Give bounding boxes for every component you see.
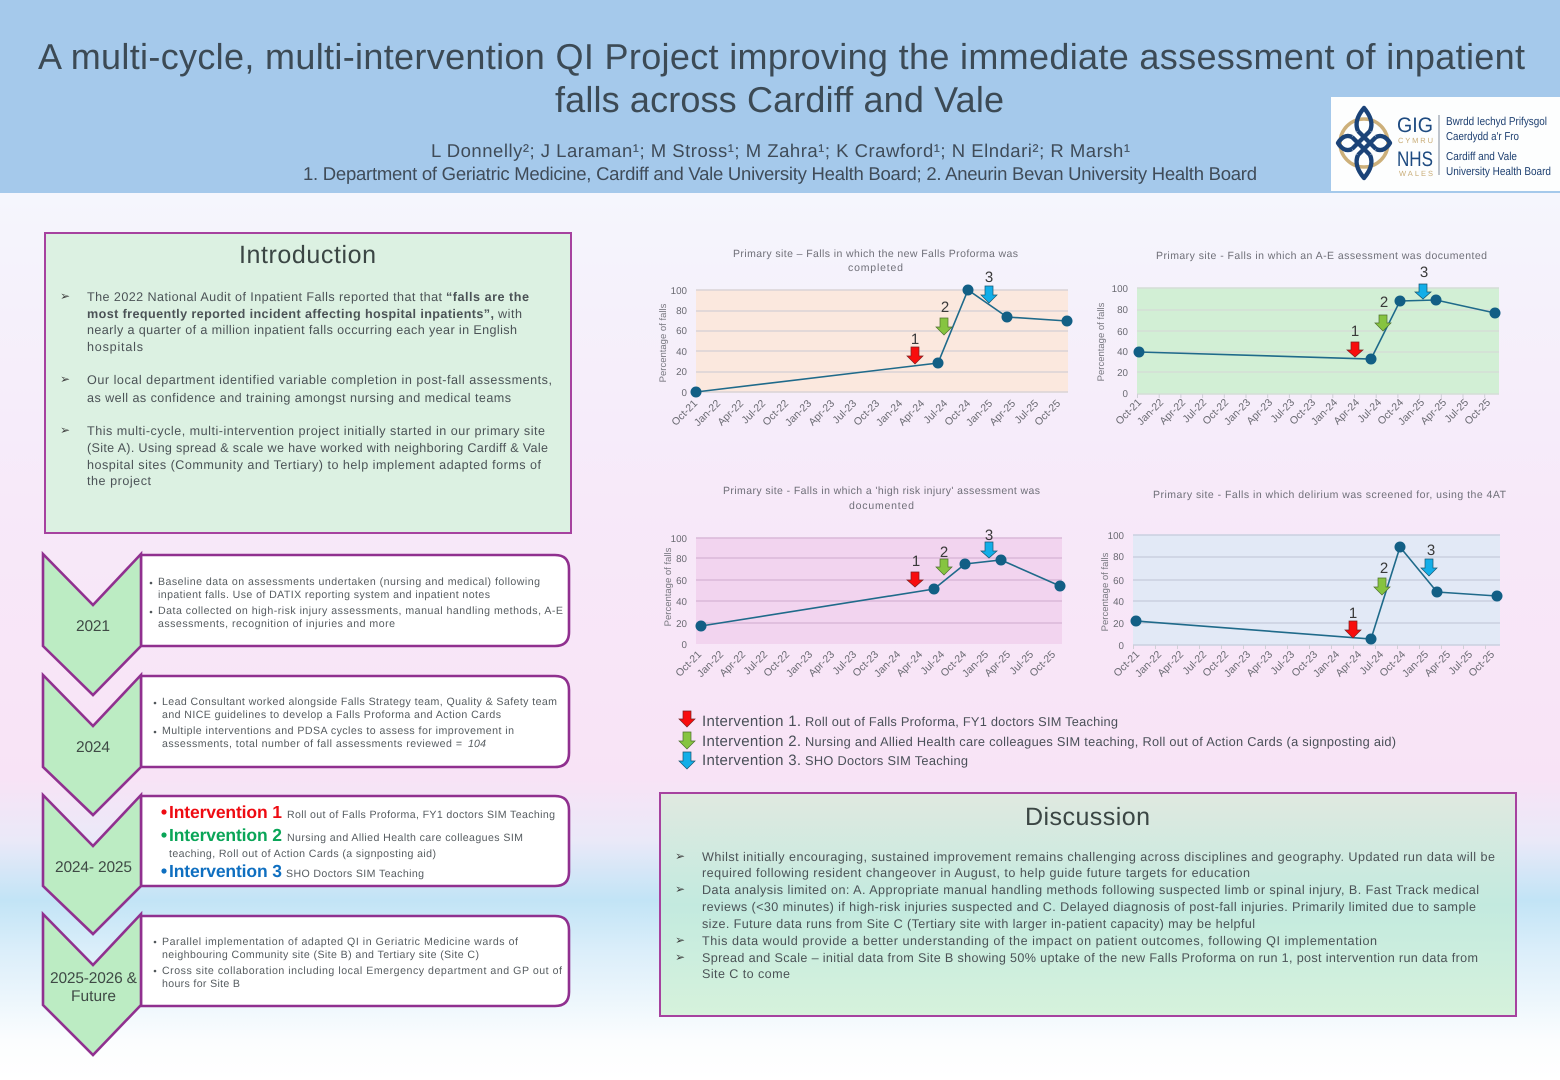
text block: discussion points: reviews (<30 minutes) if high-risk injuries suspected and C. Delayed diagnosis of post-fall injuries. Primarily limited due to sample bbox=[702, 900, 1476, 914]
timeline step: 2021 bbox=[43, 554, 569, 695]
chart: A-E assessment documented: Percentage of falls bbox=[1096, 302, 1107, 381]
chart: delirium screened with 4AT: Oct-24 bbox=[1377, 649, 1408, 679]
chart: A-E assessment documented: 0 bbox=[1123, 389, 1129, 400]
text block: discussion points: ➢ bbox=[675, 950, 685, 964]
timeline step: 2021: Data collected on high-risk injury assessments, manual handling methods, A-E bbox=[158, 605, 563, 617]
chart: high risk injury assessment documented: 60 bbox=[676, 576, 688, 587]
timeline step: 2024-2025 interventions: Intervention 2 bbox=[169, 825, 282, 845]
text block: local department: Our local department identified variable completion in post-fall assessments, bbox=[87, 373, 552, 387]
chart: falls proforma completed: Jul-24 bbox=[921, 398, 950, 426]
chart: high risk injury assessment documented bbox=[663, 485, 1066, 680]
text block: project scope: (Site A). Using spread & scale we have worked with neighboring Cardiff & Vale bbox=[87, 441, 548, 455]
text block: discussion points bbox=[675, 849, 1495, 981]
chart: falls proforma completed: Percentage of falls bbox=[658, 303, 669, 382]
chart: falls proforma completed: Jul-25 bbox=[1012, 398, 1041, 426]
chart: falls proforma completed: Jul-23 bbox=[830, 398, 859, 426]
chart: A-E assessment documented: Jul-24 bbox=[1355, 397, 1384, 425]
chart: high risk injury assessment documented: 80 bbox=[676, 554, 688, 565]
chart: high risk injury assessment documented: documented bbox=[849, 500, 914, 512]
timeline step: 2025-2026 and future: Cross site collaboration including local Emergency department and GP out of bbox=[162, 965, 562, 977]
chart: A-E assessment documented: Apr-22 bbox=[1157, 397, 1188, 427]
chart: A-E assessment documented: Oct-21 bbox=[1113, 397, 1144, 427]
timeline step: 2025-2026 and future bbox=[43, 914, 569, 1055]
chart: delirium screened with 4AT: Jul-25 bbox=[1446, 649, 1475, 677]
text block: discussion points: ➢ bbox=[675, 933, 685, 947]
timeline step: 2021: inpatient falls. Use of DATIX reporting system and inpatient notes bbox=[158, 589, 490, 601]
title: A multi-cycle, multi-intervention QI Project improving the immediate assessment of inpatient bbox=[38, 36, 1525, 77]
chart: delirium screened with 4AT: 40 bbox=[1113, 597, 1125, 608]
timeline step: 2024-2025 interventions: SHO Doctors SIM Teaching bbox=[286, 868, 424, 880]
chart: delirium screened with 4AT: Apr-23 bbox=[1244, 649, 1275, 679]
legend: interventions: Intervention 3. bbox=[702, 752, 801, 769]
text block: discussion points: This data would provide a better understanding of the impact on patient outcomes, following QI implementation bbox=[702, 934, 1377, 948]
chart: falls proforma completed: Oct-21 bbox=[669, 398, 700, 428]
chart: A-E assessment documented: 80 bbox=[1117, 305, 1129, 316]
legend: interventions: Intervention 2. bbox=[702, 733, 801, 750]
timeline step: 2024-2025 interventions: teaching, Roll out of Action Cards (a signposting aid) bbox=[169, 848, 436, 860]
timeline step: 2021: Baseline data on assessments undertaken (nursing and medical) following bbox=[158, 576, 540, 588]
timeline step: 2024: 104 bbox=[468, 738, 486, 750]
text block: audit findings bbox=[60, 289, 529, 354]
chart: A-E assessment documented: Oct-24 bbox=[1375, 397, 1406, 427]
timeline step: 2024: 2024 bbox=[76, 739, 110, 756]
chart: delirium screened with 4AT: Apr-24 bbox=[1333, 649, 1364, 679]
chart: delirium screened with 4AT: Apr-22 bbox=[1155, 649, 1186, 679]
text block: audit findings: ➢ bbox=[60, 289, 70, 303]
text block: discussion points: Data analysis limited on: A. Appropriate manual handling methods following suspected limb or spinal injury, B. Fast Track medical bbox=[702, 883, 1479, 897]
text block: local department bbox=[60, 372, 552, 405]
chart: high risk injury assessment documented: Percentage of falls bbox=[663, 547, 674, 626]
chart: delirium screened with 4AT: 2 bbox=[1380, 560, 1388, 577]
title: falls across Cardiff and Vale bbox=[555, 79, 1004, 120]
chart: high risk injury assessment documented: Oct-22 bbox=[761, 649, 792, 679]
panel: introduction bbox=[45, 233, 571, 533]
title bbox=[38, 36, 1525, 120]
heading: introduction: Introduction bbox=[239, 241, 376, 269]
chart: high risk injury assessment documented: Apr-24 bbox=[894, 649, 925, 679]
timeline step: 2024-2025 interventions: 2024- 2025 bbox=[55, 859, 132, 876]
chart: A-E assessment documented: 40 bbox=[1117, 347, 1129, 358]
timeline step: 2024-2025 interventions bbox=[43, 795, 569, 934]
chart: falls proforma completed: Jul-22 bbox=[739, 398, 768, 426]
timeline step: 2024-2025 interventions: Nursing and Allied Health care colleagues SIM bbox=[287, 832, 523, 844]
chart: high risk injury assessment documented: Jan-23 bbox=[784, 649, 815, 680]
chart: falls proforma completed: 20 bbox=[676, 367, 688, 378]
chart: A-E assessment documented: Jan-25 bbox=[1396, 397, 1427, 428]
text block: local department: as well as confidence and training amongst nursing and medical teams bbox=[87, 391, 511, 405]
chart: delirium screened with 4AT: Jul-23 bbox=[1268, 649, 1297, 677]
chart: delirium screened with 4AT: Oct-22 bbox=[1200, 649, 1231, 679]
text block: discussion points: ➢ bbox=[675, 882, 685, 896]
chart: delirium screened with 4AT: Jan-22 bbox=[1133, 649, 1164, 680]
chart: high risk injury assessment documented: Apr-25 bbox=[982, 649, 1013, 679]
chart: high risk injury assessment documented: Jan-24 bbox=[872, 649, 903, 680]
text block: local department: ➢ bbox=[60, 372, 70, 386]
text block: discussion points: Spread and Scale – initial data from Site B showing 50% uptake of the new Falls Proforma on run 1, post intervention run data from bbox=[702, 951, 1478, 965]
chart: delirium screened with 4AT: Percentage of falls bbox=[1100, 552, 1111, 631]
logo: Cardiff and Vale University Health Board: Caerdydd a'r Fro bbox=[1446, 131, 1519, 143]
chart: high risk injury assessment documented: Oct-23 bbox=[850, 649, 881, 679]
chart: A-E assessment documented: Apr-25 bbox=[1418, 397, 1449, 427]
timeline step: 2024-2025 interventions: Intervention 3 bbox=[169, 861, 282, 881]
text block: discussion points: size. Future data runs from Site C (Tertiary site with larger in-patient capacity) may be helpful bbox=[702, 917, 1255, 931]
chart: A-E assessment documented: Apr-24 bbox=[1331, 397, 1362, 427]
chart: A-E assessment documented: Jan-23 bbox=[1222, 397, 1253, 428]
chart: falls proforma completed: Oct-22 bbox=[760, 398, 791, 428]
chart: high risk injury assessment documented: Oct-21 bbox=[673, 649, 704, 679]
chart: high risk injury assessment documented: 0 bbox=[682, 640, 688, 651]
timeline step: 2021: assessments, recognition of injuries and more bbox=[158, 618, 395, 630]
text block: audit findings: most frequently reported incident affecting hospital inpatients”, bbox=[87, 307, 494, 321]
chart: A-E assessment documented: Apr-23 bbox=[1244, 397, 1275, 427]
chart: falls proforma completed: Oct-24 bbox=[942, 398, 973, 428]
timeline step: 2024: Lead Consultant worked alongside Falls Strategy team, Quality & Safety team bbox=[162, 696, 557, 708]
chart: falls proforma completed: completed bbox=[848, 262, 903, 274]
timeline step: 2025-2026 and future: hours for Site B bbox=[162, 978, 240, 990]
chart: A-E assessment documented: Jan-24 bbox=[1309, 397, 1340, 428]
chart: A-E assessment documented: Jul-25 bbox=[1442, 397, 1471, 425]
header banner bbox=[0, 0, 1560, 193]
chart: delirium screened with 4AT: 60 bbox=[1113, 576, 1125, 587]
chart: falls proforma completed: 3 bbox=[985, 269, 993, 286]
chart: delirium screened with 4AT: 3 bbox=[1427, 542, 1435, 559]
chart: falls proforma completed: 1 bbox=[911, 331, 919, 348]
timeline step: 2024: Multiple interventions and PDSA cycles to assess for improvement in bbox=[162, 725, 514, 737]
timeline step: 2025-2026 and future: Parallel implementation of adapted QI in Geriatric Medicine wards of bbox=[162, 936, 518, 948]
chart: A-E assessment documented: 1 bbox=[1351, 323, 1359, 340]
timeline step: 2024: and NICE guidelines to develop a Falls Proforma and Action Cards bbox=[162, 709, 501, 721]
chart: high risk injury assessment documented: Jul-25 bbox=[1007, 649, 1036, 677]
chart: A-E assessment documented: 60 bbox=[1117, 327, 1129, 338]
chart: high risk injury assessment documented: Jan-22 bbox=[695, 649, 726, 680]
chart: falls proforma completed: 60 bbox=[676, 326, 688, 337]
logo: Cardiff and Vale University Health Board bbox=[1331, 97, 1560, 191]
chart: falls proforma completed: Jan-24 bbox=[874, 398, 905, 429]
chart: delirium screened with 4AT: Jan-25 bbox=[1400, 649, 1431, 680]
chart: high risk injury assessment documented: Apr-22 bbox=[717, 649, 748, 679]
chart: delirium screened with 4AT bbox=[1100, 489, 1507, 680]
chart: A-E assessment documented: 3 bbox=[1420, 264, 1428, 281]
text block: discussion points: Site C to come bbox=[702, 967, 790, 981]
chart: falls proforma completed: Jan-25 bbox=[964, 398, 995, 429]
chart: A-E assessment documented: Jan-22 bbox=[1135, 397, 1166, 428]
chart: falls proforma completed bbox=[658, 248, 1072, 429]
authors: L Donnelly²; J Laraman¹; M Stross¹; M Zahra¹; K Crawford¹; N Elndari²; R Marsh¹ bbox=[431, 140, 1130, 161]
chart: falls proforma completed: 0 bbox=[682, 388, 688, 399]
chart: falls proforma completed: 2 bbox=[941, 299, 949, 316]
chart: delirium screened with 4AT: Oct-21 bbox=[1111, 649, 1142, 679]
logo: Cardiff and Vale University Health Board: WALES bbox=[1399, 169, 1433, 178]
chart: high risk injury assessment documented: Jan-25 bbox=[960, 649, 991, 680]
chart: high risk injury assessment documented: 2 bbox=[940, 544, 948, 561]
legend: interventions: Nursing and Allied Health care colleagues SIM teaching, Roll out of Action Cards (a signposting aid) bbox=[805, 734, 1396, 749]
chart: delirium screened with 4AT: Jul-24 bbox=[1357, 649, 1386, 677]
chart: falls proforma completed: 100 bbox=[671, 286, 688, 297]
chart: delirium screened with 4AT: Jul-22 bbox=[1180, 649, 1209, 677]
chart: high risk injury assessment documented: 20 bbox=[676, 619, 688, 630]
logo: Cardiff and Vale University Health Board: GIG bbox=[1397, 114, 1433, 137]
chart: high risk injury assessment documented: 100 bbox=[671, 534, 688, 545]
chart: delirium screened with 4AT: Apr-25 bbox=[1422, 649, 1453, 679]
text block: project scope: ➢ bbox=[60, 423, 70, 437]
affiliations: 1. Department of Geriatric Medicine, Cardiff and Vale University Health Board; 2. Aneurin Bevan University Health Board bbox=[303, 163, 1257, 184]
chart: high risk injury assessment documented: Jul-23 bbox=[830, 649, 859, 677]
timeline step: 2024-2025 interventions: Roll out of Falls Proforma, FY1 doctors SIM Teaching bbox=[287, 809, 555, 821]
timeline step: 2024 bbox=[43, 675, 569, 815]
chart: high risk injury assessment documented: 1 bbox=[912, 553, 920, 570]
logo: Cardiff and Vale University Health Board: NHS bbox=[1397, 148, 1433, 171]
chart: falls proforma completed: Primary site – Falls in which the new Falls Proforma was bbox=[733, 248, 1018, 260]
heading: discussion: Discussion bbox=[1025, 803, 1150, 831]
chart: A-E assessment documented: Primary site - Falls in which an A-E assessment was documented bbox=[1156, 250, 1487, 262]
text block: project scope: This multi-cycle, multi-intervention project initially started in our primary site bbox=[87, 424, 545, 438]
chart: high risk injury assessment documented: Jul-24 bbox=[918, 649, 947, 677]
text block: discussion points: ➢ bbox=[675, 849, 685, 863]
chart: A-E assessment documented: 2 bbox=[1380, 294, 1388, 311]
chart: A-E assessment documented: Oct-25 bbox=[1462, 397, 1493, 427]
chart: falls proforma completed: Apr-24 bbox=[896, 398, 927, 428]
chart: delirium screened with 4AT: 1 bbox=[1349, 605, 1357, 622]
timeline step: 2021: 2021 bbox=[76, 618, 110, 635]
chart: high risk injury assessment documented: Oct-25 bbox=[1027, 649, 1058, 679]
text block: discussion points: Whilst initially encouraging, sustained improvement remains challenging across disciplines and geography. Updated run data will be bbox=[702, 850, 1495, 864]
chart: A-E assessment documented: Jul-22 bbox=[1180, 397, 1209, 425]
chart: falls proforma completed: Oct-23 bbox=[851, 398, 882, 428]
text block: audit findings: nearly a quarter of a million inpatient falls occurring each year in English bbox=[87, 323, 517, 337]
chart: delirium screened with 4AT: Primary site - Falls in which delirium was screened for, using the 4AT bbox=[1153, 489, 1507, 501]
chart: high risk injury assessment documented: Jul-22 bbox=[741, 649, 770, 677]
chart: A-E assessment documented: 20 bbox=[1117, 368, 1129, 379]
text block: audit findings: “falls are the bbox=[446, 290, 529, 304]
chart: high risk injury assessment documented: 3 bbox=[985, 527, 993, 544]
text block: audit findings: with bbox=[497, 307, 522, 321]
text block: audit findings: hospitals bbox=[87, 340, 143, 354]
legend: interventions bbox=[679, 711, 1396, 769]
chart: delirium screened with 4AT: 80 bbox=[1113, 552, 1125, 563]
chart: falls proforma completed: 80 bbox=[676, 306, 688, 317]
chart: high risk injury assessment documented: 40 bbox=[676, 597, 688, 608]
chart: delirium screened with 4AT: 20 bbox=[1113, 619, 1125, 630]
timeline step: 2025-2026 and future: neighbouring Community site (Site B) and Tertiary site (Site C) bbox=[162, 949, 479, 961]
text block: project scope: hospital sites (Community and Tertiary) to help implement adapted forms of bbox=[87, 458, 542, 472]
chart: delirium screened with 4AT: 0 bbox=[1119, 641, 1125, 652]
chart: falls proforma completed: Apr-23 bbox=[806, 398, 837, 428]
chart: A-E assessment documented: Oct-22 bbox=[1200, 397, 1231, 427]
chart: falls proforma completed: 40 bbox=[676, 347, 688, 358]
text block: audit findings: The 2022 National Audit of Inpatient Falls reported that that bbox=[87, 290, 442, 304]
chart: falls proforma completed: Apr-25 bbox=[987, 398, 1018, 428]
chart: delirium screened with 4AT: Oct-25 bbox=[1466, 649, 1497, 679]
timeline step: 2024: assessments, total number of fall assessments reviewed = bbox=[162, 738, 462, 750]
legend: interventions: SHO Doctors SIM Teaching bbox=[805, 753, 968, 768]
chart: high risk injury assessment documented: Apr-23 bbox=[806, 649, 837, 679]
legend: interventions: Intervention 1. bbox=[702, 713, 801, 730]
logo: Cardiff and Vale University Health Board: Bwrdd Iechyd Prifysgol bbox=[1446, 116, 1547, 128]
logo: Cardiff and Vale University Health Board: CYMRU bbox=[1398, 136, 1433, 145]
timeline step: 2024-2025 interventions: Intervention 1 bbox=[169, 802, 282, 822]
chart: falls proforma completed: Oct-25 bbox=[1032, 398, 1063, 428]
logo: Cardiff and Vale University Health Board: Cardiff and Vale bbox=[1446, 151, 1517, 163]
chart: delirium screened with 4AT: Oct-23 bbox=[1289, 649, 1320, 679]
chart: high risk injury assessment documented: Oct-24 bbox=[938, 649, 969, 679]
chart: delirium screened with 4AT: Jan-23 bbox=[1222, 649, 1253, 680]
chart: A-E assessment documented: Jul-23 bbox=[1268, 397, 1297, 425]
chart: falls proforma completed: Jan-23 bbox=[783, 398, 814, 429]
chart: delirium screened with 4AT: 100 bbox=[1108, 531, 1125, 542]
chart: A-E assessment documented: Oct-23 bbox=[1287, 397, 1318, 427]
legend: interventions: Roll out of Falls Proforma, FY1 doctors SIM Teaching bbox=[805, 714, 1118, 729]
chart: high risk injury assessment documented: Primary site - Falls in which a 'high risk injury' assessment was bbox=[723, 485, 1040, 497]
chart: A-E assessment documented: 100 bbox=[1112, 284, 1129, 295]
text block: project scope bbox=[60, 423, 548, 488]
timeline step: 2025-2026 and future: Future bbox=[71, 988, 116, 1005]
chart: A-E assessment documented bbox=[1096, 250, 1500, 428]
panel: discussion bbox=[660, 793, 1516, 1016]
text block: project scope: the project bbox=[87, 474, 152, 488]
chart: falls proforma completed: Apr-22 bbox=[715, 398, 746, 428]
timeline step: 2025-2026 and future: 2025-2026 & bbox=[50, 970, 138, 987]
chart: falls proforma completed: Jan-22 bbox=[692, 398, 723, 429]
chart: delirium screened with 4AT: Jan-24 bbox=[1311, 649, 1342, 680]
text block: discussion points: required following resident changeover in August, to help guide future targets for education bbox=[702, 866, 1250, 880]
